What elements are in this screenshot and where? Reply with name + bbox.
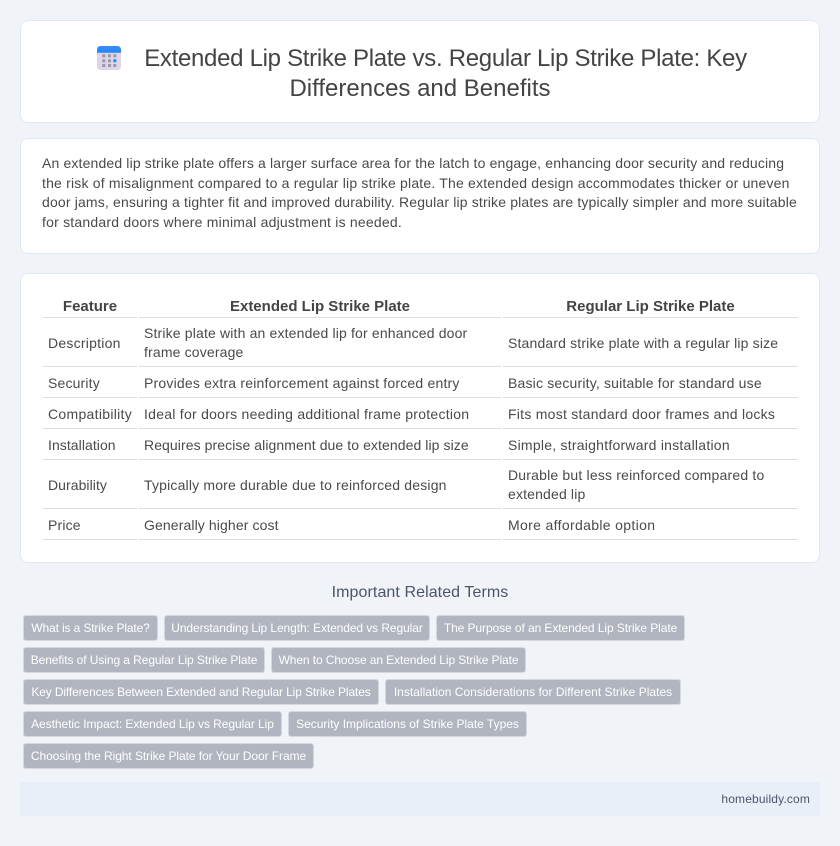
table header: Feature <box>63 298 117 315</box>
related term tags: Benefits of Using a Regular Lip Strike Plate <box>31 653 257 667</box>
intro paragraph: the risk of misalignment compared to a regular lip strike plate. The extended design accommodates thicker or uneven <box>42 175 790 191</box>
intro paragraph: for standard doors where minimal adjustment is needed. <box>42 214 402 230</box>
row: durability: Durable but less reinforced compared to <box>508 467 764 483</box>
related term tags: Aesthetic Impact: Extended Lip vs Regular Lip <box>31 717 274 731</box>
row: durability <box>48 467 764 502</box>
row: security: Basic security, suitable for standard use <box>508 375 762 391</box>
table header <box>63 298 735 315</box>
row: price <box>48 517 655 533</box>
row: description: Strike plate with an extended lip for enhanced door <box>144 325 467 341</box>
row: price: More affordable option <box>508 517 655 533</box>
row: installation: Simple, straightforward installation <box>508 437 730 453</box>
related term tags: The Purpose of an Extended Lip Strike Plate <box>444 621 677 635</box>
row: compatibility <box>48 406 775 422</box>
title: Differences and Benefits <box>289 75 551 102</box>
related term tags: Understanding Lip Length: Extended vs Regular <box>171 621 423 635</box>
row: compatibility: Ideal for doors needing additional frame protection <box>144 406 469 422</box>
row: security: Security <box>48 375 100 391</box>
row: description: Standard strike plate with a regular lip size <box>508 335 778 351</box>
icon: calendar <box>97 46 121 70</box>
footer source text: homebuildy.com <box>721 792 810 806</box>
title <box>144 45 747 102</box>
row: durability: Durability <box>48 477 107 493</box>
row: compatibility: Fits most standard door frames and locks <box>508 406 775 422</box>
related term tags: Security Implications of Strike Plate Types <box>296 717 519 731</box>
related term tags: Installation Considerations for Different Strike Plates <box>394 685 672 699</box>
related terms heading: Important Related Terms <box>332 584 508 601</box>
comparison table panel <box>20 273 820 563</box>
related term tags: What is a Strike Plate? <box>31 621 150 635</box>
related term tags: When to Choose an Extended Lip Strike Plate <box>279 653 518 667</box>
row: price: Price <box>48 517 81 533</box>
row: price: Generally higher cost <box>144 517 279 533</box>
row: description: frame coverage <box>144 344 244 360</box>
row: durability: extended lip <box>508 486 585 502</box>
row: security: Provides extra reinforcement against forced entry <box>144 375 460 391</box>
row: installation: Requires precise alignment due to extended lip size <box>144 437 469 453</box>
row: installation <box>48 437 730 453</box>
footer bar <box>20 782 820 816</box>
row: description: Description <box>48 335 121 351</box>
title card <box>20 20 820 123</box>
title: Extended Lip Strike Plate vs. Regular Lip Strike Plate: Key <box>144 45 747 72</box>
related term tags <box>23 615 685 769</box>
related term tags: Key Differences Between Extended and Regular Lip Strike Plates <box>31 685 371 699</box>
intro paragraph: door jams, ensuring a tighter fit and improved durability. Regular lip strike plates are typically simpler and more suitable <box>42 194 797 210</box>
row: description <box>48 325 778 360</box>
related term tags: Choosing the Right Strike Plate for Your Door Frame <box>31 749 306 763</box>
row: installation: Installation <box>48 437 116 453</box>
row: security <box>48 375 762 391</box>
row: compatibility: Compatibility <box>48 406 132 422</box>
table header: Extended Lip Strike Plate <box>230 298 410 315</box>
intro paragraph: An extended lip strike plate offers a larger surface area for the latch to engage, enhancing door security and reducing <box>42 155 784 171</box>
intro text panel <box>20 138 820 254</box>
intro paragraph <box>42 155 797 230</box>
table header: Regular Lip Strike Plate <box>566 298 735 315</box>
row: durability: Typically more durable due to reinforced design <box>144 477 447 493</box>
